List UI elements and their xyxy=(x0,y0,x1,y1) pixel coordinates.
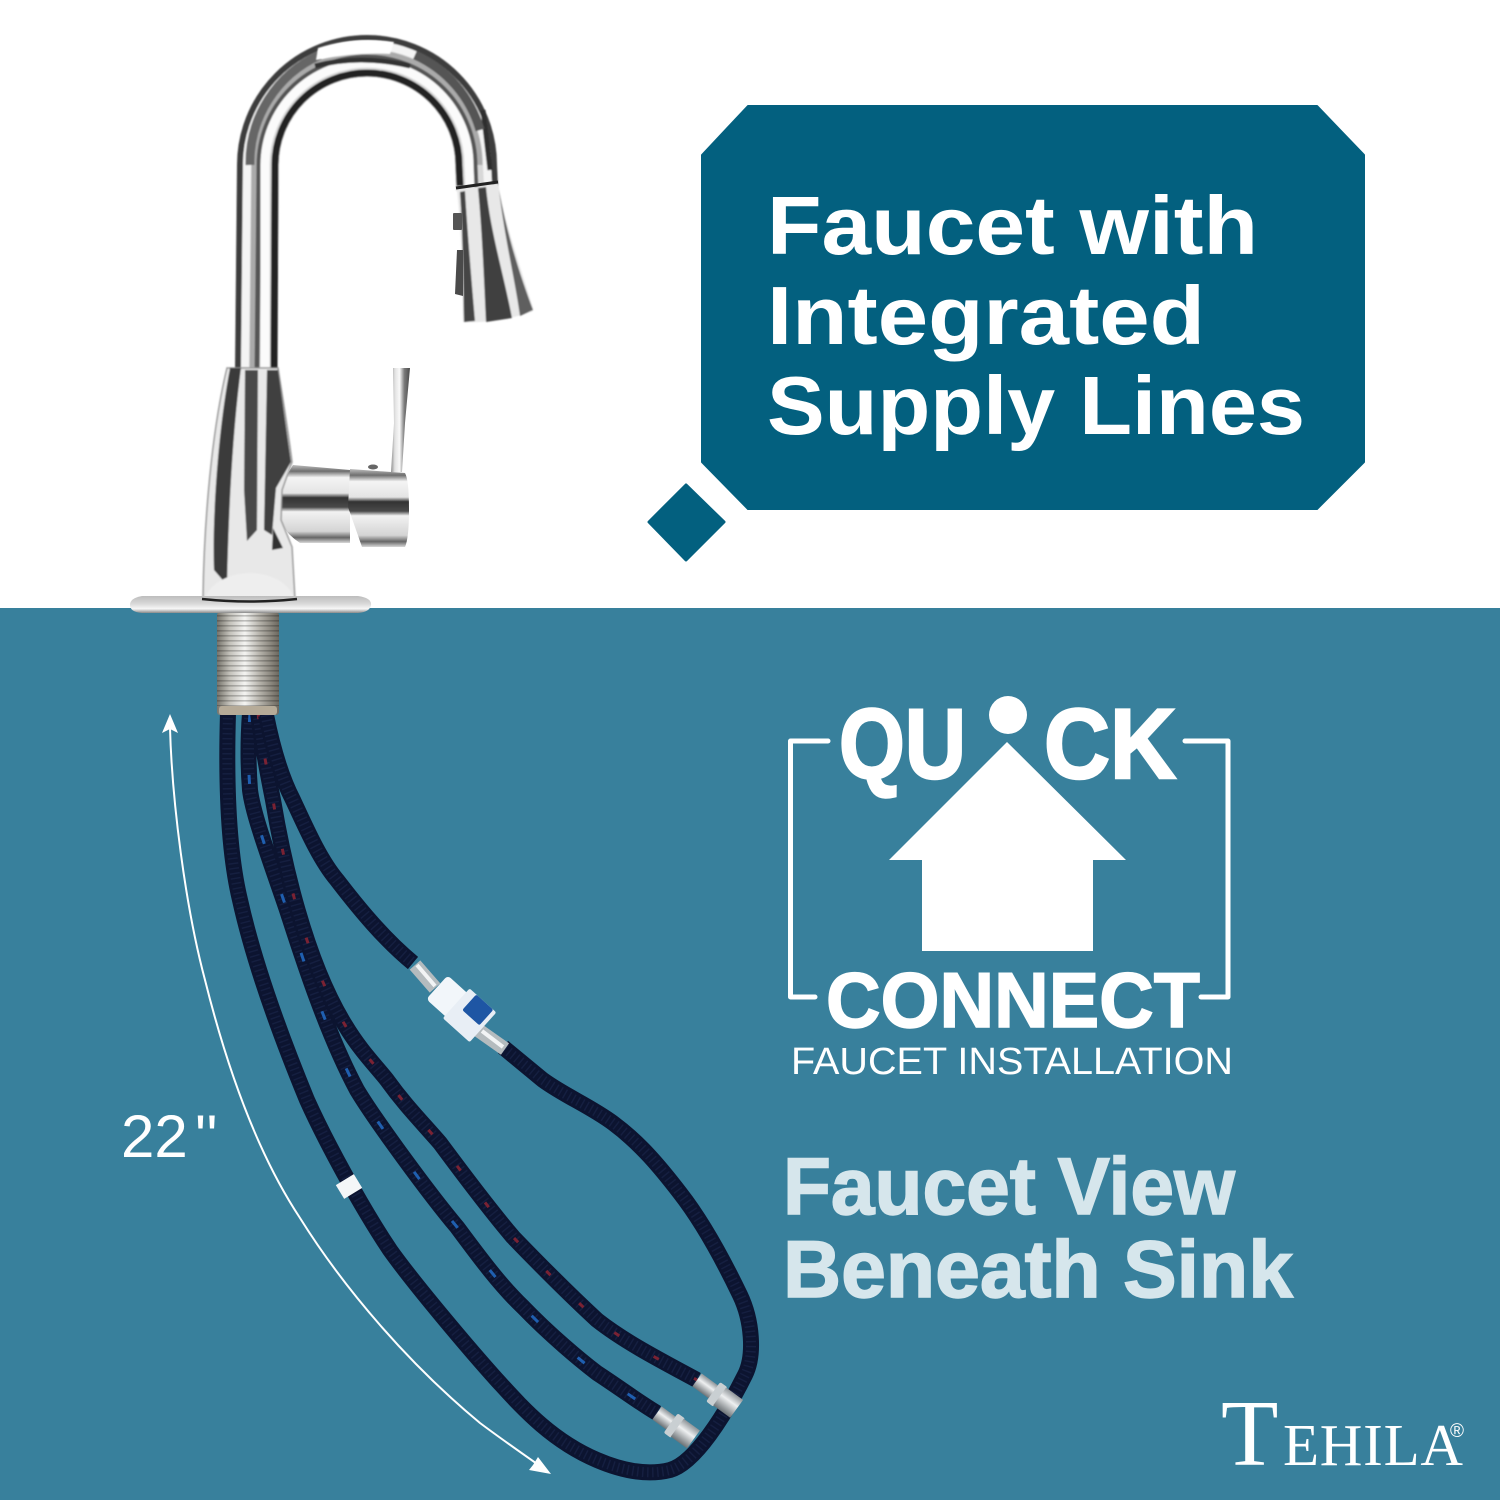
gooseneck spout xyxy=(238,38,495,372)
hose: upper line to connector xyxy=(266,715,413,963)
Quick Connect logo xyxy=(790,688,1233,1083)
QU letters: QU xyxy=(839,688,966,799)
spray button xyxy=(453,213,462,230)
quick connector xyxy=(415,965,505,1049)
braided supply hoses xyxy=(227,713,751,1472)
hose: blue-thread line xyxy=(248,713,657,1413)
Tehila brand logo xyxy=(1221,1382,1464,1486)
ring at spray head xyxy=(456,182,498,188)
house icon xyxy=(889,742,1126,951)
heading: Faucet with Integrated Supply Lines: Integrated xyxy=(767,269,1205,362)
heading: Faucet with Integrated Supply Lines xyxy=(767,179,1305,452)
speech bubble xyxy=(649,106,1364,560)
subheading: Faucet View Beneath Sink: Faucet View xyxy=(783,1142,1236,1232)
Tehila brand logo: ® xyxy=(1450,1421,1464,1442)
subheading: Faucet View Beneath Sink: Beneath Sink xyxy=(783,1225,1294,1315)
hose label band xyxy=(340,1181,358,1192)
bubble tail diamond xyxy=(649,485,724,560)
fitting: red-line end nut xyxy=(690,1370,744,1419)
top highlight on spout xyxy=(316,40,394,60)
threaded shank xyxy=(217,612,279,715)
CONNECT word: CONNECT xyxy=(826,956,1200,1044)
fitting: blue-line end nut xyxy=(650,1403,700,1449)
chrome faucet xyxy=(130,38,533,613)
hose: looped line with quick connector xyxy=(227,713,751,1472)
subheading: Faucet View Beneath Sink xyxy=(783,1142,1294,1315)
label: 22 inches: 22'' xyxy=(121,1103,218,1170)
Tehila brand logo: T xyxy=(1221,1382,1278,1486)
background: under-sink teal panel xyxy=(0,608,1500,1500)
Tehila brand logo: EHILA xyxy=(1283,1412,1463,1478)
bracket frame xyxy=(790,741,1228,997)
i dot xyxy=(989,696,1027,734)
faucet base body xyxy=(203,368,295,600)
metal ferrules xyxy=(415,965,505,1049)
hose: red-thread line xyxy=(258,713,697,1380)
lever xyxy=(391,368,410,472)
spray trigger xyxy=(455,250,463,296)
heading: Faucet with Integrated Supply Lines: Faucet with xyxy=(767,179,1258,272)
heading: Faucet with Integrated Supply Lines: Supply Lines xyxy=(767,359,1305,452)
FAUCET INSTALLATION subtitle: FAUCET INSTALLATION xyxy=(791,1041,1233,1083)
mixer handle cylinder xyxy=(272,465,409,547)
CK letters: CK xyxy=(1044,688,1176,799)
pull-down spray head xyxy=(457,183,533,322)
deck plate xyxy=(130,596,371,613)
white body with blue release button xyxy=(424,972,496,1042)
22 inch measurement arrow xyxy=(121,714,551,1474)
lever screw xyxy=(368,464,378,470)
